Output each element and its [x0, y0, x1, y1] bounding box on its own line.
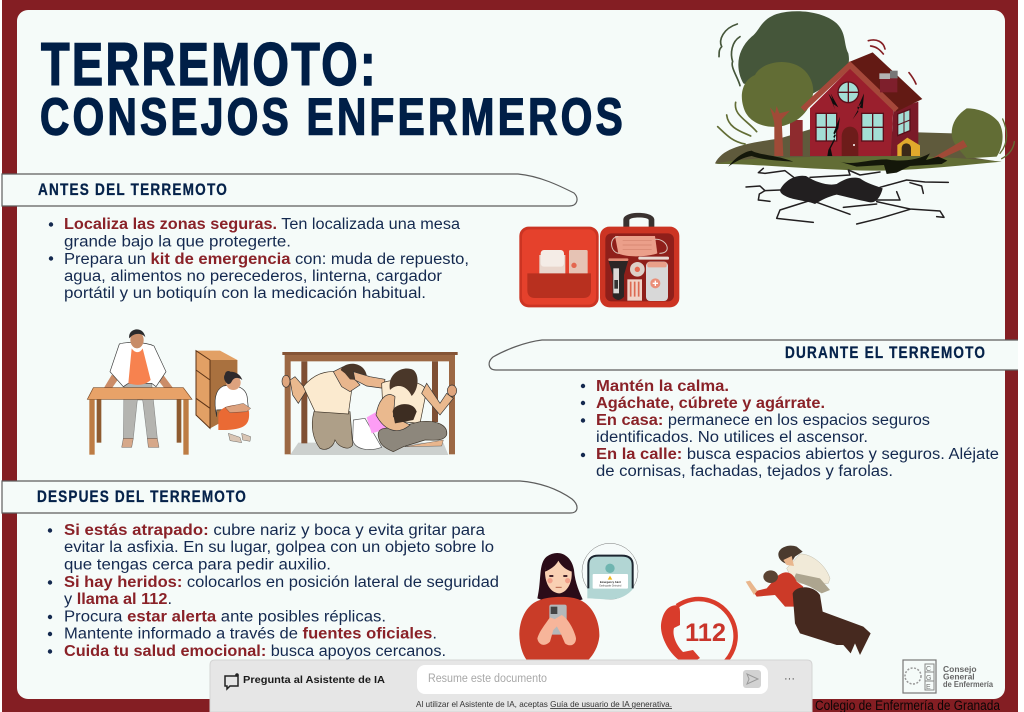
icon: phone 112: 112 [685, 619, 726, 647]
section header: antes: ANTES DEL TERREMOTO [38, 181, 227, 199]
illustration: woman with phone alert: Earthquake Detected [599, 585, 622, 588]
logo: consejo general de enfermeria: General [943, 672, 975, 682]
list: despues del terremoto: Si estás atrapado: cubre nariz y boca y evita gritar para [64, 522, 485, 539]
list: antes del terremoto: Localiza las zonas seguras. Ten localizada una mesa [64, 216, 460, 233]
logo: consejo general de enfermeria: de Enfermería [943, 679, 993, 689]
list: antes del terremoto: agua, alimentos no perecederos, linterna, cargador [64, 268, 442, 285]
illustration: woman with phone alert [519, 543, 638, 660]
list: durante el terremoto: Mantén la calma. [596, 378, 729, 395]
section header: durante: DURANTE EL TERREMOTO [785, 344, 985, 362]
list: durante el terremoto: En la calle: busca espacios abiertos y seguros. Aléjate [596, 446, 999, 463]
list: durante el terremoto: de cornisas, fachadas, tejados y farolas. [596, 463, 893, 480]
list: despues del terremoto: evitar la asfixia. En su lugar, golpea con un objeto sobre lo [64, 539, 494, 556]
list: despues del terremoto: y llama al 112 . [64, 591, 172, 608]
list: antes del terremoto [49, 216, 469, 302]
logo: consejo general de enfermeria: Consejo [943, 664, 977, 674]
logo: consejo general de enfermeria: E [926, 684, 931, 691]
ground cracks [746, 168, 948, 224]
AI assistant bar [210, 660, 812, 712]
section header: despues [2, 481, 577, 513]
illustration: man at table and woman by boxes [87, 329, 251, 455]
title: CONSEJOS ENFERMEROS [40, 88, 623, 146]
title [40, 31, 623, 146]
illustration: house in earthquake [715, 11, 1014, 224]
AI assistant bar: Pregunta al Asistente de IA [243, 674, 385, 686]
logo: consejo general de enfermeria [903, 660, 993, 693]
logo: consejo general de enfermeria: G [926, 675, 931, 682]
list: antes del terremoto: portátil y un botiquín con la medicación habitual. [64, 285, 426, 302]
AI assistant bar: ··· [784, 673, 795, 685]
list: despues del terremoto: Procura estar alerta ante posibles réplicas. [64, 608, 386, 626]
list: durante el terremoto: identificados. No utilices el ascensor. [596, 429, 868, 446]
icon: phone 112 [661, 599, 736, 673]
illustration: woman with phone alert: Emergency Alert [600, 580, 621, 584]
list: despues del terremoto: Cuida tu salud emocional: busca apoyos cercanos. [64, 643, 446, 660]
title: TERREMOTO: [41, 31, 376, 98]
icon: emergency kit [519, 213, 679, 307]
list: despues del terremoto: que tengas cerca para pedir auxilio. [64, 556, 331, 574]
list: antes del terremoto: grande bajo la que protegerte. [64, 234, 291, 250]
section header: antes [2, 174, 577, 206]
logo: consejo general de enfermeria: C [926, 666, 931, 673]
list: despues del terremoto: Si hay heridos: colocarlos en posición lateral de seguridad [64, 574, 499, 591]
illustration: family sheltering under table [282, 352, 458, 455]
section header: durante [489, 340, 1018, 370]
list: despues del terremoto [48, 522, 499, 660]
list: durante el terremoto [581, 378, 999, 480]
section header: despues: DESPUES DEL TERREMOTO [37, 488, 246, 506]
list: despues del terremoto: Mantente informado a través de fuentes oficiales . [64, 626, 437, 642]
list: durante el terremoto: Agáchate, cúbrete y agárrate. [596, 395, 825, 412]
AI assistant bar: Al utilizar el Asistente de IA, aceptas Guía de usuario de IA generativa. [416, 699, 672, 709]
illustration: recovery position [746, 546, 871, 655]
list: durante el terremoto: En casa: permanece en los espacios seguros [596, 412, 930, 429]
AI assistant bar: Resume este documento [428, 673, 547, 685]
list: antes del terremoto: Prepara un kit de emergencia con: muda de repuesto, [64, 251, 469, 268]
